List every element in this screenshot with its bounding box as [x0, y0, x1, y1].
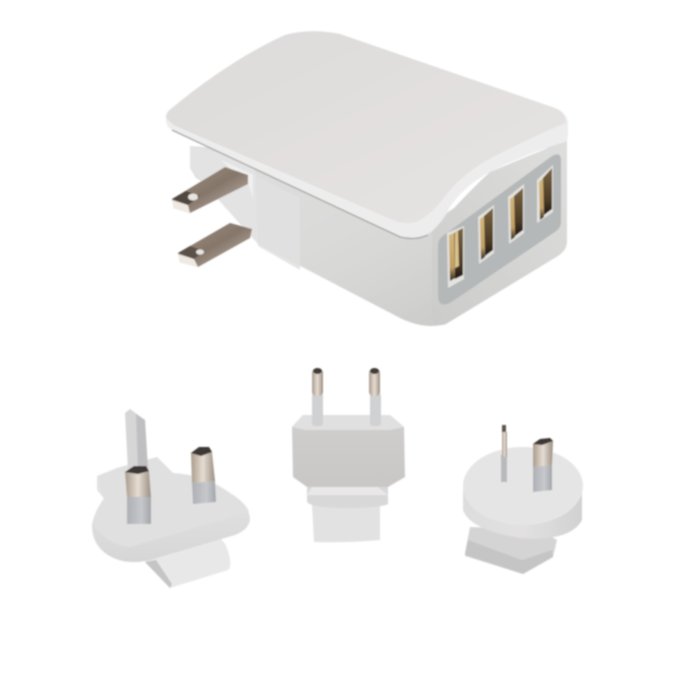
- AU adapter: [463, 425, 583, 574]
- charger lid top: [166, 31, 566, 223]
- AU thin pin: [501, 425, 507, 482]
- EU body: [292, 415, 405, 487]
- EU stem: [312, 505, 380, 542]
- upper prong: [172, 160, 253, 213]
- EU adapter: [292, 368, 405, 542]
- charger lid edge: [166, 31, 568, 238]
- USB port 2: [478, 205, 494, 264]
- charger end face: [432, 140, 567, 325]
- AU blade pin: [533, 438, 553, 492]
- AU disc face: [463, 447, 583, 525]
- USB port 1: [447, 226, 464, 288]
- UK base face: [92, 457, 249, 547]
- lower prong: [178, 223, 252, 267]
- UK live pin: [125, 466, 151, 524]
- AU stem: [465, 527, 557, 574]
- main charger: [166, 31, 568, 326]
- AU disc side: [463, 485, 582, 539]
- EU pin left: [312, 368, 323, 426]
- EU pin right: [369, 368, 381, 426]
- EU collar: [307, 487, 388, 508]
- USB panel: [438, 154, 561, 304]
- UK neutral pin: [191, 447, 216, 504]
- UK stem: [145, 538, 230, 588]
- USB port 4: [537, 165, 553, 223]
- translucent plug base: [190, 146, 258, 244]
- USB port 3: [508, 184, 524, 244]
- UK earth pin: [125, 409, 148, 470]
- lid shadow line: [172, 130, 428, 239]
- UK base rim: [92, 457, 250, 562]
- UK adapter: [92, 409, 250, 588]
- charger body side: [190, 135, 567, 326]
